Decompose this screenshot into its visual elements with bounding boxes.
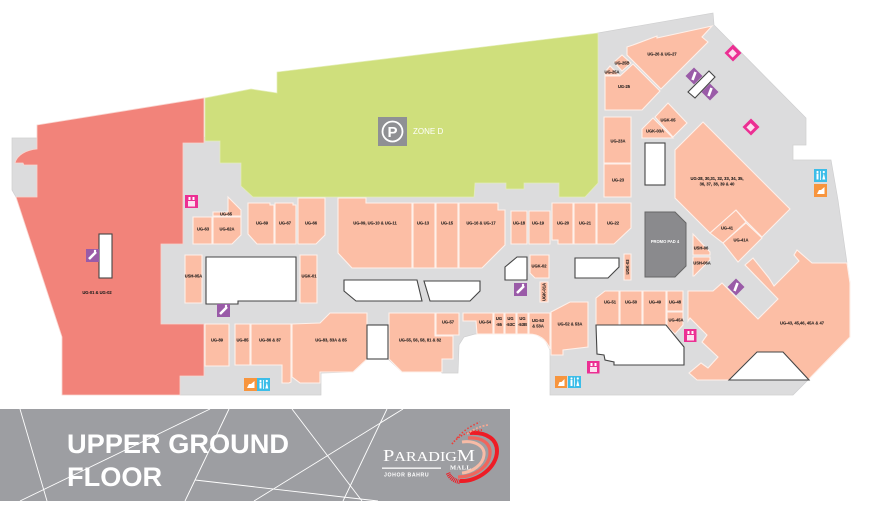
icon: escalator diamond <box>702 84 718 100</box>
shop: UG-25A <box>604 66 620 75</box>
heading line 2: FLOOR <box>67 461 163 492</box>
shop: UG-09, UG-10 & UG-11 <box>338 198 412 268</box>
shop: UG-85 <box>235 324 250 365</box>
shop: UG-52 & 53A <box>551 302 588 355</box>
shop: UG-45A <box>667 312 684 334</box>
shop: UG-63 <box>193 217 212 244</box>
shop: USH-06 <box>693 234 710 255</box>
void: atrium 9 <box>729 352 809 380</box>
shop: UG-26 & UG-27: UG-26 & UG-27 <box>647 52 677 56</box>
banner lines <box>20 409 403 501</box>
banner <box>0 409 510 501</box>
shop: UG-53C <box>505 313 516 334</box>
shop: UG-83, 83A & 85 <box>292 313 367 383</box>
shop: UG-41A: UG-41A <box>733 238 749 242</box>
shop: UG-15 <box>436 203 458 268</box>
shop: UGK-05 <box>655 103 687 137</box>
shop: UG-67: UG-67 <box>279 220 292 226</box>
shop: UG-66: UG-66 <box>305 220 318 226</box>
shop: UGK-03A: UGK-03A <box>646 128 664 134</box>
shop: UG-25 <box>605 64 660 110</box>
shop: UG-53 & 53A <box>529 313 550 349</box>
logo swoosh <box>448 422 497 482</box>
shop: UG-43, 45, 46, 45A & 47 <box>688 250 850 380</box>
icon: escalator diamond <box>686 68 702 84</box>
shop: UG-52 & 53A: UG-52 & 53A <box>558 322 582 326</box>
shop: UGK-05: UGK-05 <box>660 118 676 122</box>
void: atrium 8 <box>596 325 684 365</box>
shop: UG-49: UG-49 <box>649 300 662 304</box>
shop: UG-86 & 87 <box>251 324 291 383</box>
shop: UG-20: UG-20 <box>557 220 570 226</box>
shop: UG-23A: UG-23A <box>610 138 626 144</box>
shop: UG-67 <box>275 203 296 244</box>
void: atrium 7 <box>575 258 619 278</box>
void: atrium 6 <box>505 257 527 280</box>
icon: toilets <box>568 376 581 388</box>
shop: UG-41A <box>723 223 762 262</box>
shop: UG-26 & UG-27 <box>627 26 712 89</box>
shop: UG-65 <box>213 197 241 216</box>
shop: UG-41: UG-41 <box>721 226 734 230</box>
shop: UG-25: UG-25 <box>618 84 631 89</box>
void: atrium 2 <box>206 257 296 304</box>
shop: UG-53B: -53B <box>518 322 527 327</box>
shop: UG-65: UG-65 <box>220 212 233 216</box>
icon: lift <box>684 329 696 342</box>
shop: UG-13: UG-13 <box>417 220 430 226</box>
shop: UG-28 to UG-40 <box>675 122 790 237</box>
shop: UG-62A <box>213 217 241 244</box>
shop: UG-54 <box>463 313 493 334</box>
icon: lift <box>587 361 600 374</box>
void: atrium 3 <box>344 280 422 301</box>
shop: UG-25B: UG-25B <box>614 60 630 66</box>
shop: UG-25B <box>614 55 631 71</box>
shop: UG-18 <box>511 211 527 244</box>
shop: UG-55: -55 <box>496 322 503 327</box>
void: atrium 11 <box>688 71 715 98</box>
icon: escalator <box>86 249 99 262</box>
shop: UG-53B <box>517 313 528 334</box>
shop: UG-63: UG-63 <box>197 226 210 232</box>
shop: UGK-03 <box>624 254 631 280</box>
icon: parking: P <box>387 124 398 141</box>
icon: surau <box>244 378 257 391</box>
shop: UG-55, 56, 58, 81 & 82: UG-55, 56, 58, 81 & 82 <box>399 338 442 342</box>
shop: UG-48: UG-48 <box>669 300 682 304</box>
label: zone D: ZONE D <box>413 127 443 136</box>
shop: UG-21 <box>574 203 596 244</box>
icon: toilets <box>814 169 827 182</box>
shop: UG-69 <box>248 203 274 244</box>
shop: UG-55 <box>494 313 504 334</box>
shop: UG-22 <box>597 203 631 244</box>
shop: UGK-01A: UGK-01A <box>542 283 546 301</box>
shop: UG-09, UG-10 & UG-11: UG-09, UG-10 & UG-11 <box>353 220 397 226</box>
void: atrium 10 <box>645 143 665 185</box>
parking zone D <box>205 33 598 197</box>
shop: UG-23: UG-23 <box>612 178 625 182</box>
shop: UG-55, 56, 58, 81 & 82 <box>389 313 453 372</box>
shop: UG-15: UG-15 <box>441 220 454 226</box>
shop: UG-16 & UG-17 <box>459 203 505 268</box>
label: promo pad: PROMO PAD 4 <box>651 239 680 244</box>
icon: escalator diamond <box>728 278 744 296</box>
icon: escalator <box>514 283 527 296</box>
floor plan base: grey walkways <box>12 138 37 197</box>
shop: UG-57: UG-57 <box>442 320 455 324</box>
logo mall: MALL <box>450 464 471 472</box>
shop: UG-19: UG-19 <box>532 220 545 226</box>
shop: UG-20 <box>552 203 573 244</box>
shop: UG-50 <box>620 291 642 325</box>
shop: UG-13 <box>413 203 435 268</box>
shop: UGK-02 <box>530 255 549 278</box>
shop: UG-49 <box>643 291 666 325</box>
shop: UG-22: UG-22 <box>607 220 620 226</box>
shop: USH-05A: USH-05A <box>185 274 202 278</box>
shop: UG-53 & 53A: UG-53 <box>532 318 545 323</box>
shop: UG-57 <box>436 313 459 335</box>
shop: UG-28 to UG-40: UG-28, 30,31, 32, 33, 34, 35, <box>690 176 744 181</box>
shop: USH-06: USH-06 <box>694 246 709 250</box>
shop: UGK-03: UGK-03 <box>625 259 630 275</box>
icon: escalator <box>217 304 230 317</box>
shop: UG-86 & 87: UG-86 & 87 <box>259 338 282 342</box>
shop: UGK-01 <box>300 255 317 303</box>
logo word: PARADIG M <box>383 446 475 465</box>
shop: UG-69: UG-69 <box>256 220 269 226</box>
void: atrium 5 <box>367 325 388 359</box>
icon: parking <box>378 117 407 146</box>
shop: UG-21: UG-21 <box>579 220 592 226</box>
shop: UGK-01: UGK-01 <box>301 274 317 278</box>
heading: UPPER GROUND <box>67 428 289 459</box>
shop: UG-48 <box>667 291 683 311</box>
shop: UG-18: UG-18 <box>513 220 526 226</box>
shop: UG-55: UG <box>496 316 502 321</box>
shop: UG-85: UG-85 <box>236 338 249 342</box>
shop: UG-89: UG-89 <box>211 338 224 342</box>
shop: UG-50: UG-50 <box>625 300 638 304</box>
shop: UG-25A: UG-25A <box>604 70 620 74</box>
void: atrium 1 <box>99 234 112 278</box>
shop: UG-83, 83A & 85: UG-83, 83A & 85 <box>315 338 347 342</box>
shop: UG-53C: -53C <box>506 322 515 327</box>
shop: UGK-02: UGK-02 <box>531 264 547 268</box>
shop: UG-66 <box>298 198 325 244</box>
icon: lift <box>185 195 198 208</box>
icon: lift diamond <box>725 45 741 61</box>
shop: USH-05A <box>185 255 202 303</box>
shop: USH-06A: USH-06A <box>693 260 711 266</box>
shop: UG-23A <box>604 117 631 163</box>
label: UG-01 & UG-02: UG-01 & UG-02 <box>82 290 112 295</box>
shop: UG-89 <box>205 324 229 366</box>
shop: UG-45A: UG-45A <box>668 318 684 322</box>
shop: UG-54: UG-54 <box>479 320 492 324</box>
icon: lift diamond <box>743 119 759 135</box>
shop: UG-51 <box>596 291 619 325</box>
void: atrium 4 <box>424 281 480 301</box>
logo sub: JOHOR BAHRU <box>384 472 429 478</box>
shop: UG-51: UG-51 <box>604 300 617 304</box>
shop: UG-43, 45, 46, 45A & 47: UG-43, 45,46, 45A & 47 <box>780 320 825 326</box>
shop: UGK-01A <box>540 282 548 302</box>
shop: UG-28 to UG-40: 36, 37, 38, 39 & 40 <box>700 182 735 186</box>
shop: UGK-03A <box>642 118 673 138</box>
shop: UG-53 & 53A: & 53A <box>532 324 544 328</box>
shop: UG-19 <box>529 211 550 244</box>
anchor unit UG-01 & UG-02 <box>15 98 204 395</box>
icon: surau <box>555 376 567 388</box>
floor plan walkways <box>161 13 850 395</box>
icon: toilets <box>257 378 270 391</box>
shop: UG-16 & UG-17: UG-16 & UG-17 <box>466 220 496 226</box>
shop: USH-06A <box>693 257 711 276</box>
promo pad 4 <box>645 212 686 277</box>
icon: surau <box>814 184 827 197</box>
shop: UG-41 <box>710 210 746 243</box>
shop: UG-53C: UG <box>507 316 514 321</box>
shop: UG-53B: UG <box>519 316 526 321</box>
shop: UG-23 <box>604 164 631 197</box>
shop: UG-62A: UG-62A <box>219 226 235 232</box>
logo <box>382 422 497 482</box>
